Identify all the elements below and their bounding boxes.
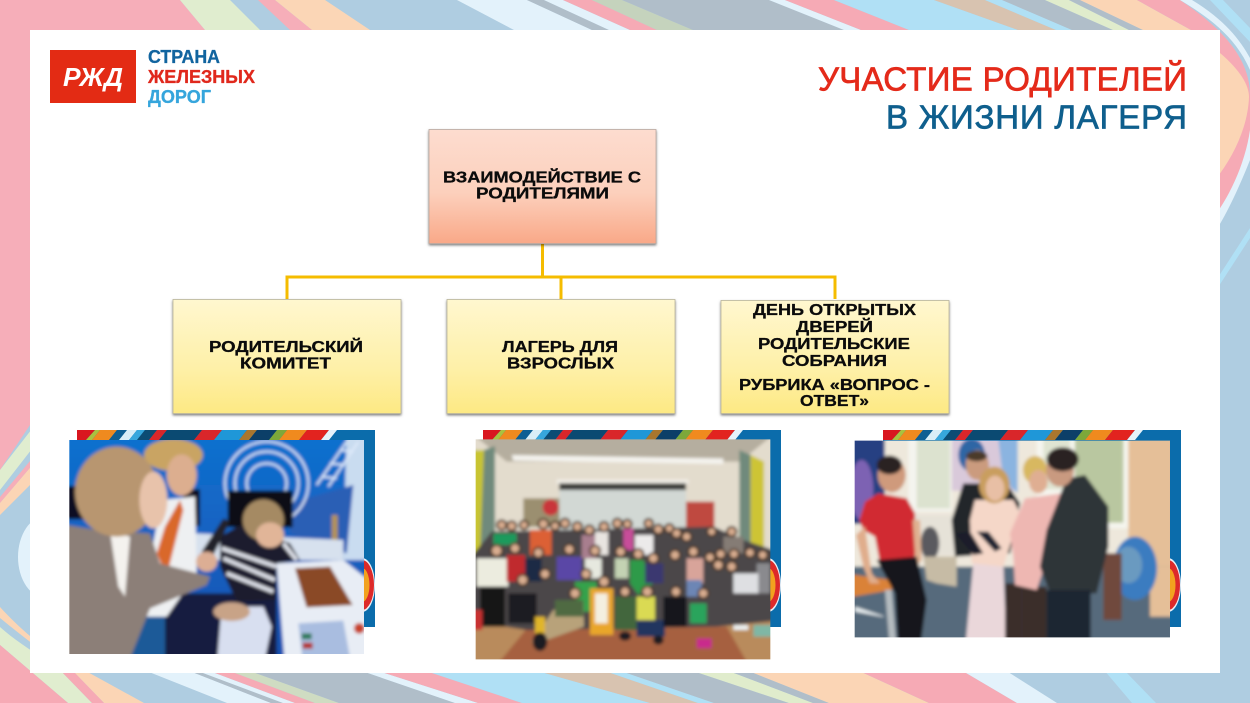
logo wordmark: [147, 47, 255, 107]
logo wordmark: СТРАНА: [148, 47, 220, 67]
box: родительский комитет: [173, 300, 401, 414]
box: лагерь для взрослых: [447, 300, 675, 414]
box: день открытых дверей: РУБРИКА «ВОПРОС -: [739, 377, 930, 394]
title: [818, 60, 1187, 136]
photo frame 2: [483, 430, 781, 627]
box: день открытых дверей: ОТВЕТ»: [800, 393, 869, 410]
photo frame 3: [883, 430, 1181, 627]
box: взаимодействие с родителями: РОДИТЕЛЯМИ: [476, 186, 609, 202]
photo 1: parents at laser engraver: [69, 440, 364, 654]
box: день открытых дверей: ДЕНЬ ОТКРЫТЫХ: [753, 302, 917, 319]
box: родительский комитет: РОДИТЕЛЬСКИЙ: [209, 338, 363, 356]
title: УЧАСТИЕ РОДИТЕЛЕЙ: [818, 60, 1187, 98]
box: лагерь для взрослых: ЛАГЕРЬ ДЛЯ: [502, 339, 618, 356]
logo mark: РЖД: [63, 62, 123, 92]
connector lines: [287, 244, 835, 299]
box: день открытых дверей: СОБРАНИЯ: [782, 353, 887, 370]
logo wordmark: ДОРОГ: [148, 87, 211, 107]
logo wordmark: ЖЕЛЕЗНЫХ: [147, 67, 255, 87]
box: взаимодействие с родителями: ВЗАИМОДЕЙСТВИЕ С: [443, 168, 641, 186]
title: В ЖИЗНИ ЛАГЕРЯ: [886, 98, 1187, 136]
box: лагерь для взрослых: ВЗРОСЛЫХ: [507, 356, 615, 372]
photo frame 1: [77, 430, 375, 627]
box: взаимодействие с родителями: [429, 130, 656, 244]
box: день открытых дверей: [721, 300, 949, 414]
box: родительский комитет: КОМИТЕТ: [240, 356, 332, 372]
box: день открытых дверей: РОДИТЕЛЬСКИЕ: [758, 336, 910, 353]
logo: РЖД Страна железных дорог: [50, 47, 255, 107]
photo 2: group of adults in hall: [476, 439, 770, 660]
logo mark: [50, 50, 136, 103]
photo 3: parents looking at tablets: [854, 440, 1170, 638]
box: день открытых дверей: ДВЕРЕЙ: [796, 318, 873, 336]
